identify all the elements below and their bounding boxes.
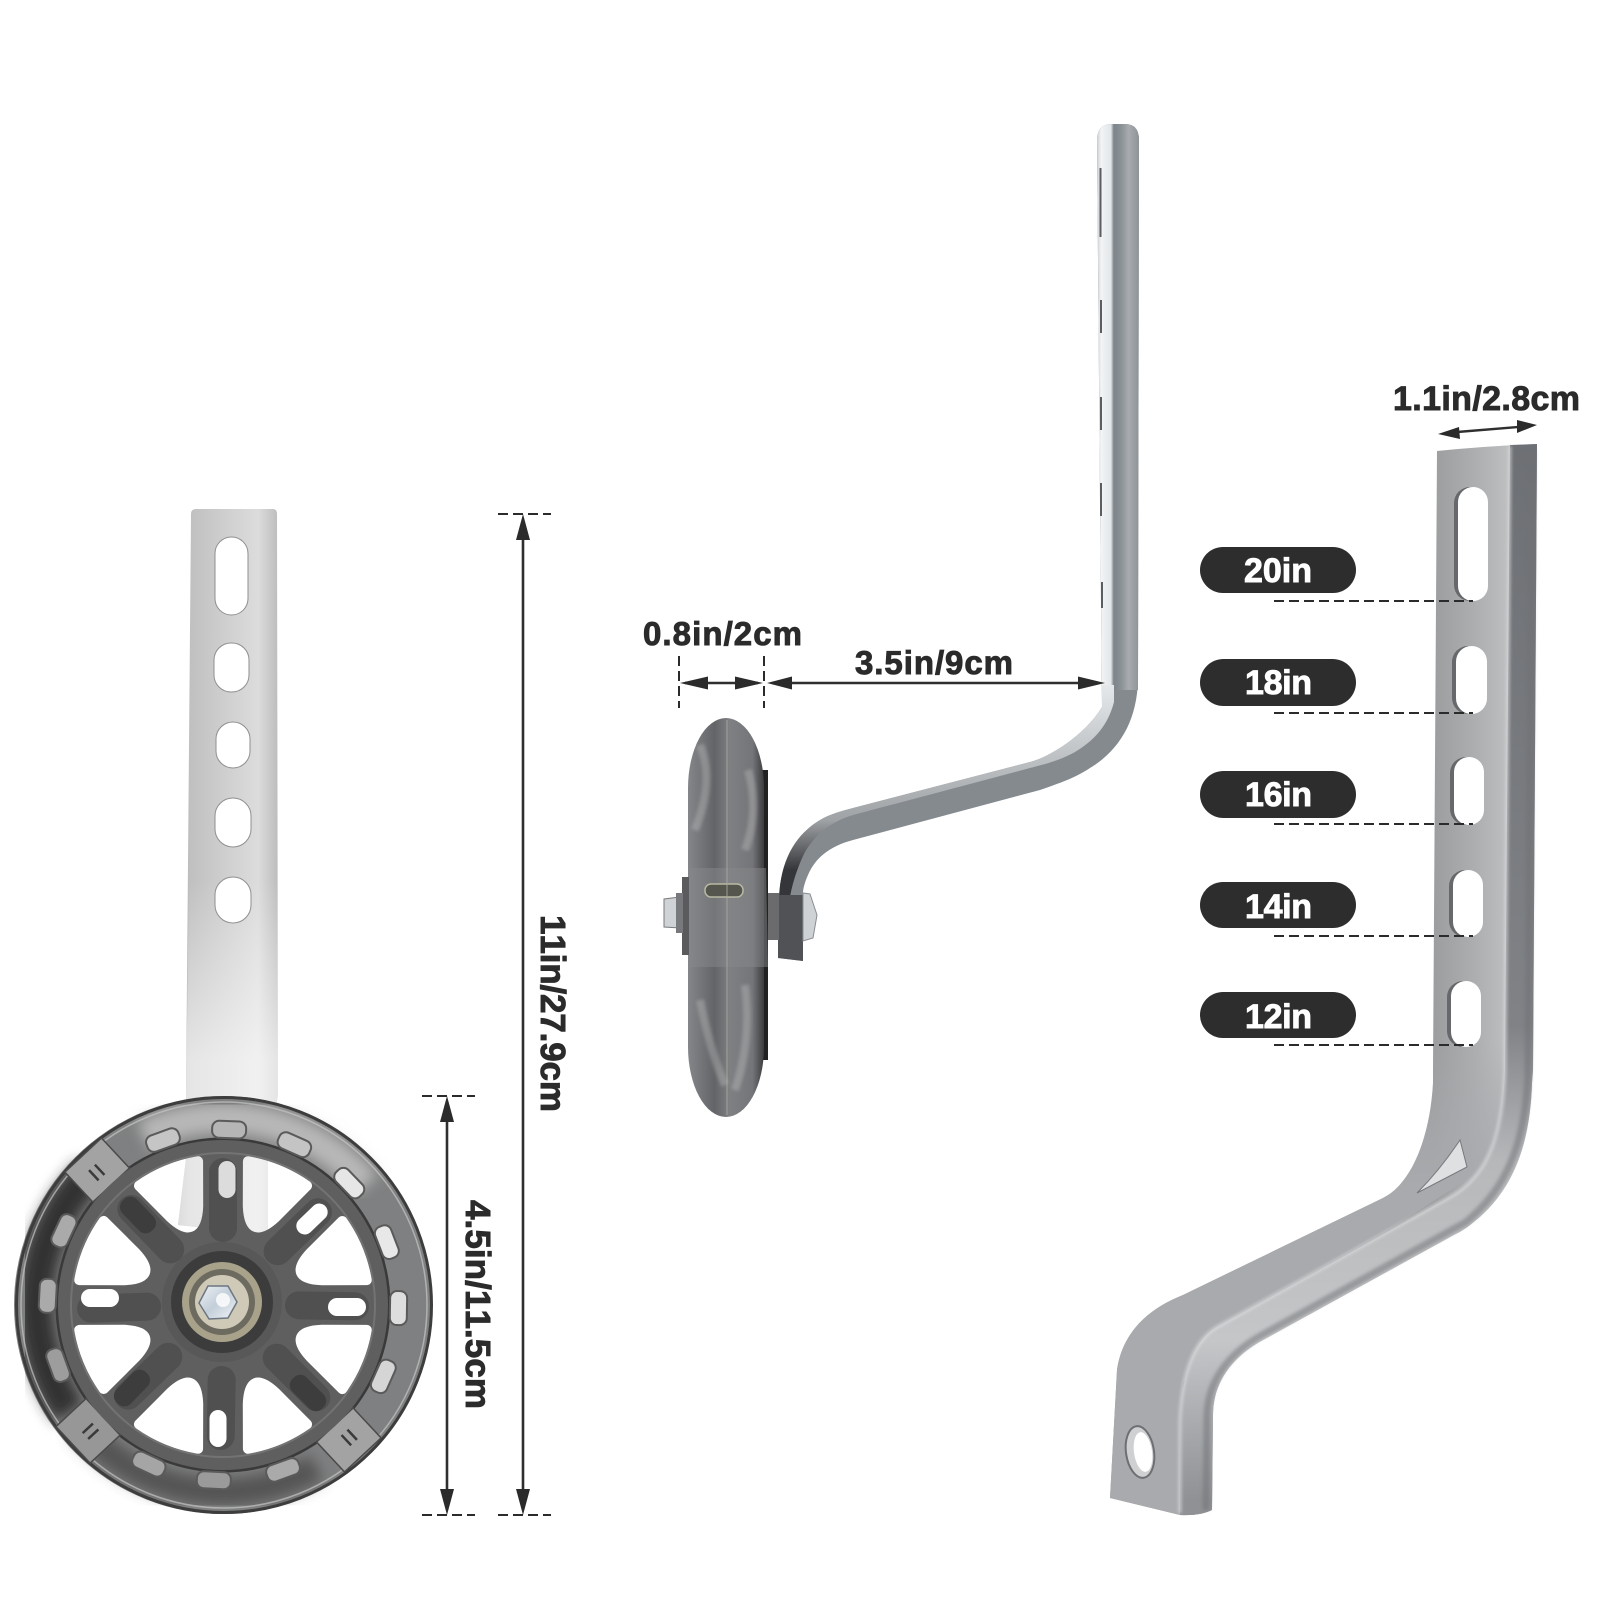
wheel size label: 12in (1200, 992, 1473, 1045)
wheel size label: 20in: 20in (1244, 552, 1312, 590)
wheel size label: 18in: 18in (1245, 664, 1312, 702)
front view bracket arm (178, 509, 278, 1235)
hub and bearing (162, 1242, 282, 1362)
dimension: overall height 11in/27.9cm: 11in/27.9cm (533, 915, 572, 1112)
spoke slots (81, 1161, 366, 1447)
bend highlight (1417, 1140, 1467, 1193)
hub band and axle (664, 868, 779, 967)
wheel size label: 20in (1200, 547, 1473, 601)
front view wheel (16, 1098, 432, 1512)
dimension: offset 3.5in/9cm: 3.5in/9cm (855, 644, 1013, 681)
wheel size label: 12in: 12in (1245, 998, 1312, 1036)
dimension: offset 3.5in/9cm (767, 644, 1105, 690)
tire joint clips (56, 1138, 381, 1472)
translucent tire (16, 1098, 432, 1512)
wheel size label: 16in (1200, 771, 1473, 824)
dimension: wheel diameter 4.5in/11.5cm: 4.5in/11.5cm (458, 1200, 497, 1409)
dimension: bracket width 1.1in/2.8cm: 1.1in/2.8cm (1393, 380, 1580, 418)
dimension: bracket width 1.1in/2.8cm (1393, 380, 1580, 439)
dimension: overall height 11in/27.9cm (498, 514, 572, 1515)
tire light slots (38, 1121, 407, 1490)
side view wheel (664, 718, 779, 1117)
bracket detail view (1110, 444, 1537, 1515)
adjustment slots (1447, 487, 1488, 1047)
side view bracket arm (778, 122, 1141, 961)
wheel size label: 14in: 14in (1245, 888, 1312, 926)
mounting plate and bolt (778, 893, 817, 961)
arm slot shadows (1100, 168, 1103, 608)
dimension: wheel diameter 4.5in/11.5cm (422, 1096, 497, 1515)
dimension: wheel width 0.8in/2cm: 0.8in/2cm (643, 615, 802, 652)
spoked rim (58, 1140, 388, 1470)
wheel size label: 14in (1200, 882, 1473, 936)
bottom mounting hole (1123, 1424, 1157, 1480)
mounting holes in front arm (214, 537, 251, 923)
wheel size label: 18in (1200, 659, 1473, 713)
dimension: wheel width 0.8in/2cm (643, 615, 802, 708)
wheel size label: 16in: 16in (1245, 776, 1312, 814)
